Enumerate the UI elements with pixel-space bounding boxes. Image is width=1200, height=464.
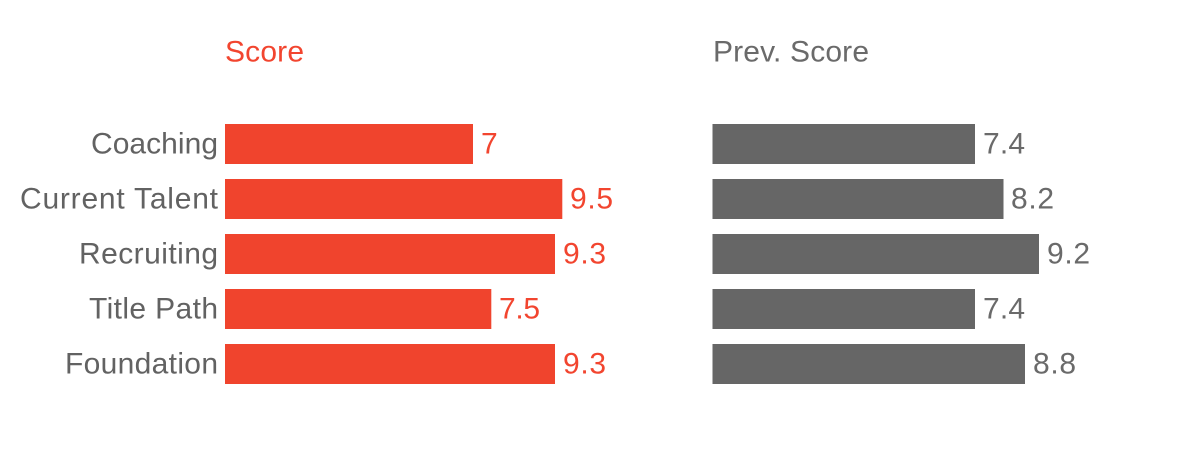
- category labels: [20, 128, 219, 380]
- score values: 9.3: [563, 348, 606, 380]
- score values: [481, 128, 613, 380]
- previous score values: 8.8: [1033, 348, 1076, 380]
- heading: Score: Score: [225, 36, 304, 68]
- previous score values: 9.2: [1047, 238, 1090, 270]
- panel: score bars: [225, 124, 562, 384]
- previous score values: 7.4: [983, 128, 1025, 160]
- category labels: Recruiting: [79, 238, 218, 270]
- score values: 7.5: [499, 292, 540, 326]
- category labels: Coaching: [91, 128, 218, 160]
- previous score values: 8.2: [1011, 182, 1054, 216]
- score values: 7: [481, 128, 498, 160]
- panel: previous score bars: [712, 124, 1039, 384]
- category labels: Foundation: [65, 348, 218, 380]
- score values: 9.5: [570, 182, 613, 216]
- previous score values: [983, 128, 1090, 380]
- previous score values: 7.4: [983, 292, 1025, 326]
- category labels: Title Path: [89, 292, 218, 326]
- category labels: Current Talent: [20, 182, 219, 216]
- heading: Prev. Score: Prev. Score: [713, 36, 869, 68]
- score values: 9.3: [563, 238, 606, 270]
